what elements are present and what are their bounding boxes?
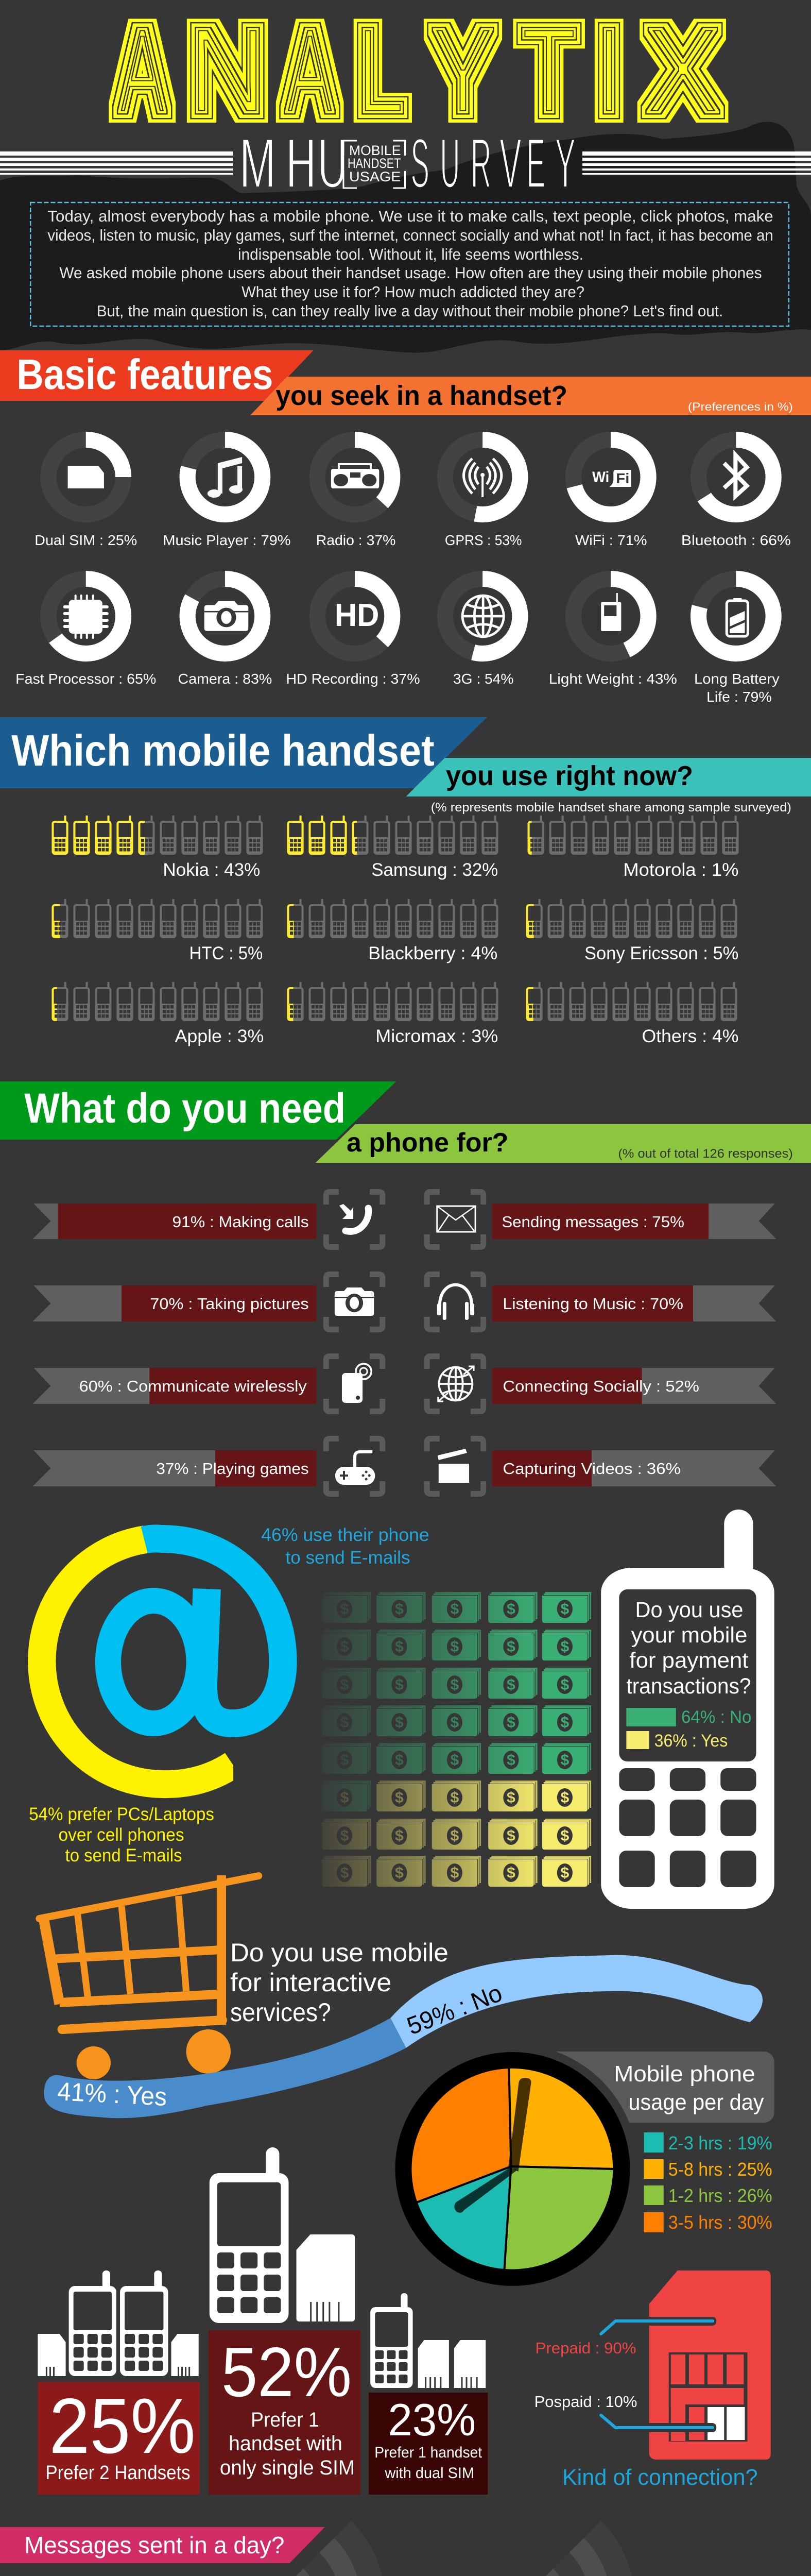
donut: Dual SIM 25% [34, 440, 137, 548]
subtitle words: M [239, 124, 275, 203]
donut: Long Battery Life 79%: Life : 79% [706, 689, 772, 705]
wave chart: interactive services: 41% : Yes [57, 2077, 168, 2111]
section header: Basic features [0, 350, 811, 415]
yellow arc: 54% prefer PCs [42, 1539, 233, 1784]
icons: two handsets with SIMs [38, 2270, 199, 2376]
donut: Bluetooth 66%: Bluetooth : 66% [681, 532, 791, 548]
section header: Basic features: you seek in a handset? [275, 380, 567, 411]
money stacks pictogram: $$$$$ [340, 1601, 570, 1618]
screen question: your mobile [631, 1623, 747, 1648]
ribbon: Listening to Music 70%: Listening to Music : 70% [503, 1295, 683, 1313]
stat card: 25% prefer 2 handsets [38, 2382, 200, 2495]
intro text box [30, 202, 789, 326]
ribbon: Communicate wirelessly 60% [32, 1368, 317, 1404]
handset share: Sony Ericsson 5% [527, 899, 738, 963]
screen question: Do you use [635, 1598, 743, 1622]
ribbon: Playing games 37%: 37% : Playing games [156, 1460, 309, 1478]
money stacks pictogram: $$$$$ [340, 1638, 570, 1655]
donut: Music Player 79% [163, 440, 291, 548]
title: ANALYTIX: A [286, 3, 334, 138]
stat card: 25% prefer 2 handsets: 25% [49, 2382, 196, 2470]
icons: one handset with single SIM [210, 2147, 355, 2323]
stat card: 52% single SIM: 52% [221, 2333, 352, 2411]
ribbon: Connecting Socially 52%: Connecting Socially : 52% [503, 1377, 699, 1395]
handset share: HTC 5%: HTC : 5% [189, 943, 263, 963]
section header: Which mobile handset [0, 717, 811, 815]
stat card: 52% single SIM: handset with [229, 2432, 342, 2455]
title: ANALYTIX: A [119, 3, 165, 138]
email at-sign chart [29, 1525, 429, 1866]
intro text box: videos, listen to music, play games, surf the internet, connect socially and what not! In fact, it has become an [47, 226, 773, 244]
section header: Messages sent in a day: Messages sent in a day? [24, 2532, 284, 2558]
screen question [626, 1598, 751, 1699]
message stat: 200+ 6% [165, 2521, 385, 2576]
handset share: Nokia 43% [53, 816, 262, 880]
stat card: 23% dual SIM [369, 2393, 488, 2495]
subtitle words: U [440, 124, 460, 203]
keypad [619, 1768, 756, 1887]
title: ANALYTIX [119, 3, 720, 138]
icon: phone call [326, 1192, 383, 1247]
donut: 3G 54% [445, 579, 520, 687]
donut: Long Battery Life 79% [694, 579, 780, 705]
big phone with payment question [601, 1510, 774, 1909]
money stacks pictogram: $$$$$ [340, 1676, 570, 1693]
stat card: 52% single SIM [209, 2330, 360, 2495]
handset share: Samsung 32%: Samsung : 32% [371, 860, 498, 880]
donut: Light Weight 43% [549, 579, 677, 687]
donut: WiFi 71%: Fi [616, 470, 629, 486]
section header: What do you need: (% out of total 126 responses) [618, 1147, 793, 1161]
donut: Bluetooth 66% [681, 440, 791, 548]
donut: Fast Processor 65% [15, 579, 156, 687]
section header: Basic features: (Preferences in %) [688, 400, 793, 413]
ribbon: Taking pictures 70% [32, 1285, 317, 1321]
money stacks pictogram [320, 1589, 594, 1889]
subtitle words: S [411, 124, 429, 203]
screen question: for payment [629, 1648, 748, 1673]
connection labels: Prepaid : 90% [536, 2339, 636, 2357]
section header: Messages sent in a day [0, 2527, 325, 2563]
ribbon: Capturing Videos 36% [492, 1450, 777, 1486]
donut: Camera 83% [178, 579, 272, 687]
donut: Long Battery Life 79%: Long Battery [694, 671, 780, 687]
handset share: Others 4% [527, 982, 738, 1046]
label: blue share: 46% use their phone [261, 1525, 429, 1545]
donut: Radio 37%: Radio : 37% [316, 532, 395, 548]
intro text box: We asked mobile phone users about their handset usage. How often are they using their mobile phones [60, 264, 762, 282]
legend: 64% : No [681, 1707, 751, 1727]
handset share: Apple 3%: Apple : 3% [175, 1026, 264, 1046]
money stacks pictogram: $$$$$ [340, 1865, 570, 1882]
subtitle words: E [527, 124, 545, 203]
stat card: 23% dual SIM: Prefer 1 handset [374, 2444, 482, 2461]
panel label: mobile phone usage per day: usage per day [628, 2090, 764, 2115]
icon: game controller [326, 1438, 383, 1494]
ribbon: Taking pictures 70%: 70% : Taking pictures [150, 1295, 309, 1313]
panel label: mobile phone usage per day: Mobile phone [614, 2061, 755, 2087]
callout line: prepaid [601, 2317, 716, 2334]
icons: one handset with dual SIM [370, 2293, 486, 2388]
intro text box: But, the main question is, can they really live a day without their mobile phone? Let's find out. [97, 302, 723, 320]
panel label: mobile phone usage per day [538, 2052, 774, 2123]
subtitle: MHU Survey: Y [555, 124, 576, 203]
ribbon: Making calls 91% [32, 1204, 317, 1239]
handset share: Motorola 1% [529, 816, 738, 880]
donut: Music Player 79%: Music Player : 79% [163, 532, 291, 548]
title: ANALYTIX: T [522, 3, 577, 138]
interactive services question: for interactive [230, 1968, 391, 1997]
callout line: postpaid [601, 2415, 716, 2432]
dark splotch behind intro [0, 122, 811, 353]
subtitle words: U [318, 124, 348, 203]
stat card: 23% dual SIM: with dual SIM [384, 2465, 474, 2482]
ribbon: Making calls 91%: 91% : Making calls [172, 1213, 309, 1231]
icon: clapperboard [427, 1438, 484, 1494]
label: blue share [261, 1525, 429, 1568]
handset share: Others 4%: Others : 4% [642, 1026, 738, 1046]
label: yellow share: over cell phones [59, 1825, 184, 1845]
legend [626, 1707, 751, 1751]
title: ANALYTIX: I [597, 3, 621, 138]
wave chart: interactive services: 59% : No [403, 1979, 506, 2040]
clock pie chart [387, 2044, 639, 2294]
section header: What do you need: What do you need [24, 1085, 346, 1132]
intro text box: What they use it for? How much addicted they are? [241, 283, 584, 301]
donut: WiFi 71% [573, 440, 648, 548]
section header: What do you need [0, 1081, 811, 1163]
subtitle words [239, 124, 576, 203]
donut: GPRS 53% [445, 440, 522, 548]
stat card: 25% prefer 2 handsets: Prefer 2 Handsets [45, 2462, 191, 2484]
ribbon: Playing games 37% [32, 1450, 317, 1486]
legend: usage per day: 5-8 hrs : 25% [668, 2159, 772, 2180]
handset share: Micromax 3%: Micromax : 3% [375, 1026, 498, 1046]
title: ANALYTIX: X [645, 3, 720, 138]
stat card: 52% single SIM: only single SIM [220, 2456, 355, 2479]
chip [669, 2352, 747, 2442]
screen question: transactions? [626, 1674, 751, 1699]
handset share: Motorola 1%: Motorola : 1% [623, 860, 738, 880]
donut: Light Weight 43%: Light Weight : 43% [549, 671, 677, 687]
title: ANALYTIX: L [357, 3, 404, 138]
ribbon: Capturing Videos 36%: Capturing Videos : 36% [503, 1460, 681, 1478]
interactive services question: Do you use mobile [230, 1938, 448, 1967]
ribbon: Sending messages 75% [492, 1204, 777, 1239]
section header: Which mobile handset: Which mobile handset [11, 726, 435, 775]
subtitle words: V [499, 124, 522, 203]
donut: HD Recording 37% [286, 579, 420, 687]
donut: Radio 37% [316, 440, 395, 548]
wave chart: interactive services [44, 1955, 763, 2118]
icon: mobile with signal [326, 1356, 383, 1412]
donut: Dual SIM 25%: Dual SIM : 25% [34, 532, 137, 548]
money stacks pictogram: $$$$$ [340, 1789, 570, 1806]
icon: headphones [427, 1275, 484, 1329]
donut: WiFi 71%: WiFi : 71% [575, 532, 647, 548]
title: ANALYTIX: N [188, 3, 266, 138]
ribbon: Communicate wirelessly 60%: 60% : Communicate wirelessly [79, 1377, 307, 1395]
blue arc: 46% use phone [108, 1538, 283, 1723]
message stat: 50-100 14% [415, 2521, 635, 2576]
handset share: Sony Ericsson 5%: Sony Ericsson : 5% [584, 943, 738, 963]
label: yellow share: to send E-mails [65, 1845, 182, 1866]
label: blue share: to send E-mails [285, 1548, 410, 1568]
section header: Basic features: Basic features [16, 350, 273, 398]
handset share: Apple 3% [53, 982, 264, 1046]
icon: globe with arrows [427, 1356, 484, 1412]
handset share: Micromax 3% [288, 982, 498, 1046]
donut: WiFi 71%: Wi [592, 469, 609, 486]
interactive services question [230, 1938, 448, 2027]
money stacks pictogram: $$$$$ [340, 1752, 570, 1769]
ribbon: Sending messages 75%: Sending messages : 75% [502, 1213, 684, 1231]
donut: GPRS 53%: GPRS : 53% [445, 532, 522, 548]
section header: What do you need: a phone for? [347, 1128, 508, 1158]
money stacks pictogram: $$$$$ [340, 1714, 570, 1731]
legend: 36% : Yes [654, 1731, 728, 1751]
legend: usage per day [644, 2132, 772, 2233]
bracketed mobile handset usage: USAGE [349, 169, 401, 184]
donut: 3G 54%: 3G : 54% [453, 671, 513, 687]
intro text box: indispensable tool. Without it, life seems worthless. [238, 245, 583, 263]
section header: Which mobile handset: (% represents mobile handset share among sample surveyed) [431, 801, 791, 815]
label: yellow share [29, 1804, 214, 1866]
title: ANALYTIX: Y [432, 3, 494, 138]
money stacks pictogram: $$$$$ [340, 1827, 570, 1844]
handset share: Samsung 32% [288, 816, 498, 880]
handset share: HTC 5% [53, 899, 263, 963]
bracketed mobile handset usage: MOBILE [349, 143, 401, 158]
label: yellow share: 54% prefer PCs/Laptops [29, 1804, 214, 1824]
ribbon: Connecting Socially 52% [492, 1368, 777, 1404]
handset share: Nokia 43%: Nokia : 43% [163, 860, 260, 880]
connection labels: Kind of connection? [562, 2465, 758, 2490]
subtitle words: H [286, 124, 316, 203]
handset share: Blackberry 4%: Blackberry : 4% [368, 943, 497, 963]
icon: envelope [427, 1192, 484, 1247]
ribbon: Listening to Music 70% [492, 1285, 777, 1321]
subtitle words: R [471, 124, 491, 203]
decorative white stripes [0, 151, 811, 175]
legend: usage per day: 3-5 hrs : 30% [668, 2212, 772, 2233]
donut: Camera 83%: Camera : 83% [178, 671, 272, 687]
stat card: 52% single SIM: Prefer 1 [251, 2409, 319, 2431]
handset share: Blackberry 4% [288, 899, 497, 963]
connection labels [534, 2339, 758, 2490]
SIM card: kind of connection [534, 2270, 771, 2490]
donut: HD Recording 37%: HD [335, 598, 379, 633]
connection labels: Pospaid : 10% [534, 2393, 637, 2411]
legend: usage per day: 1-2 hrs : 26% [668, 2185, 772, 2206]
bracketed mobile handset usage: HANDSET [348, 156, 401, 171]
subtitle: MHU Survey [0, 124, 811, 203]
bracketed mobile handset usage [343, 141, 405, 188]
icon: camera [326, 1275, 383, 1329]
donut: HD Recording 37%: HD Recording : 37% [286, 671, 420, 687]
stat card: 23% dual SIM: 23% [388, 2394, 476, 2445]
legend: usage per day: 2-3 hrs : 19% [668, 2132, 772, 2154]
section header: Which mobile handset: you use right now? [446, 760, 693, 791]
donut: Fast Processor 65%: Fast Processor : 65% [15, 671, 156, 687]
shopping cart icon [39, 1875, 258, 2079]
intro text box: Today, almost everybody has a mobile phone. We use it to make calls, text people, click photos, make [47, 207, 773, 225]
interactive services question: services? [230, 1998, 331, 2027]
